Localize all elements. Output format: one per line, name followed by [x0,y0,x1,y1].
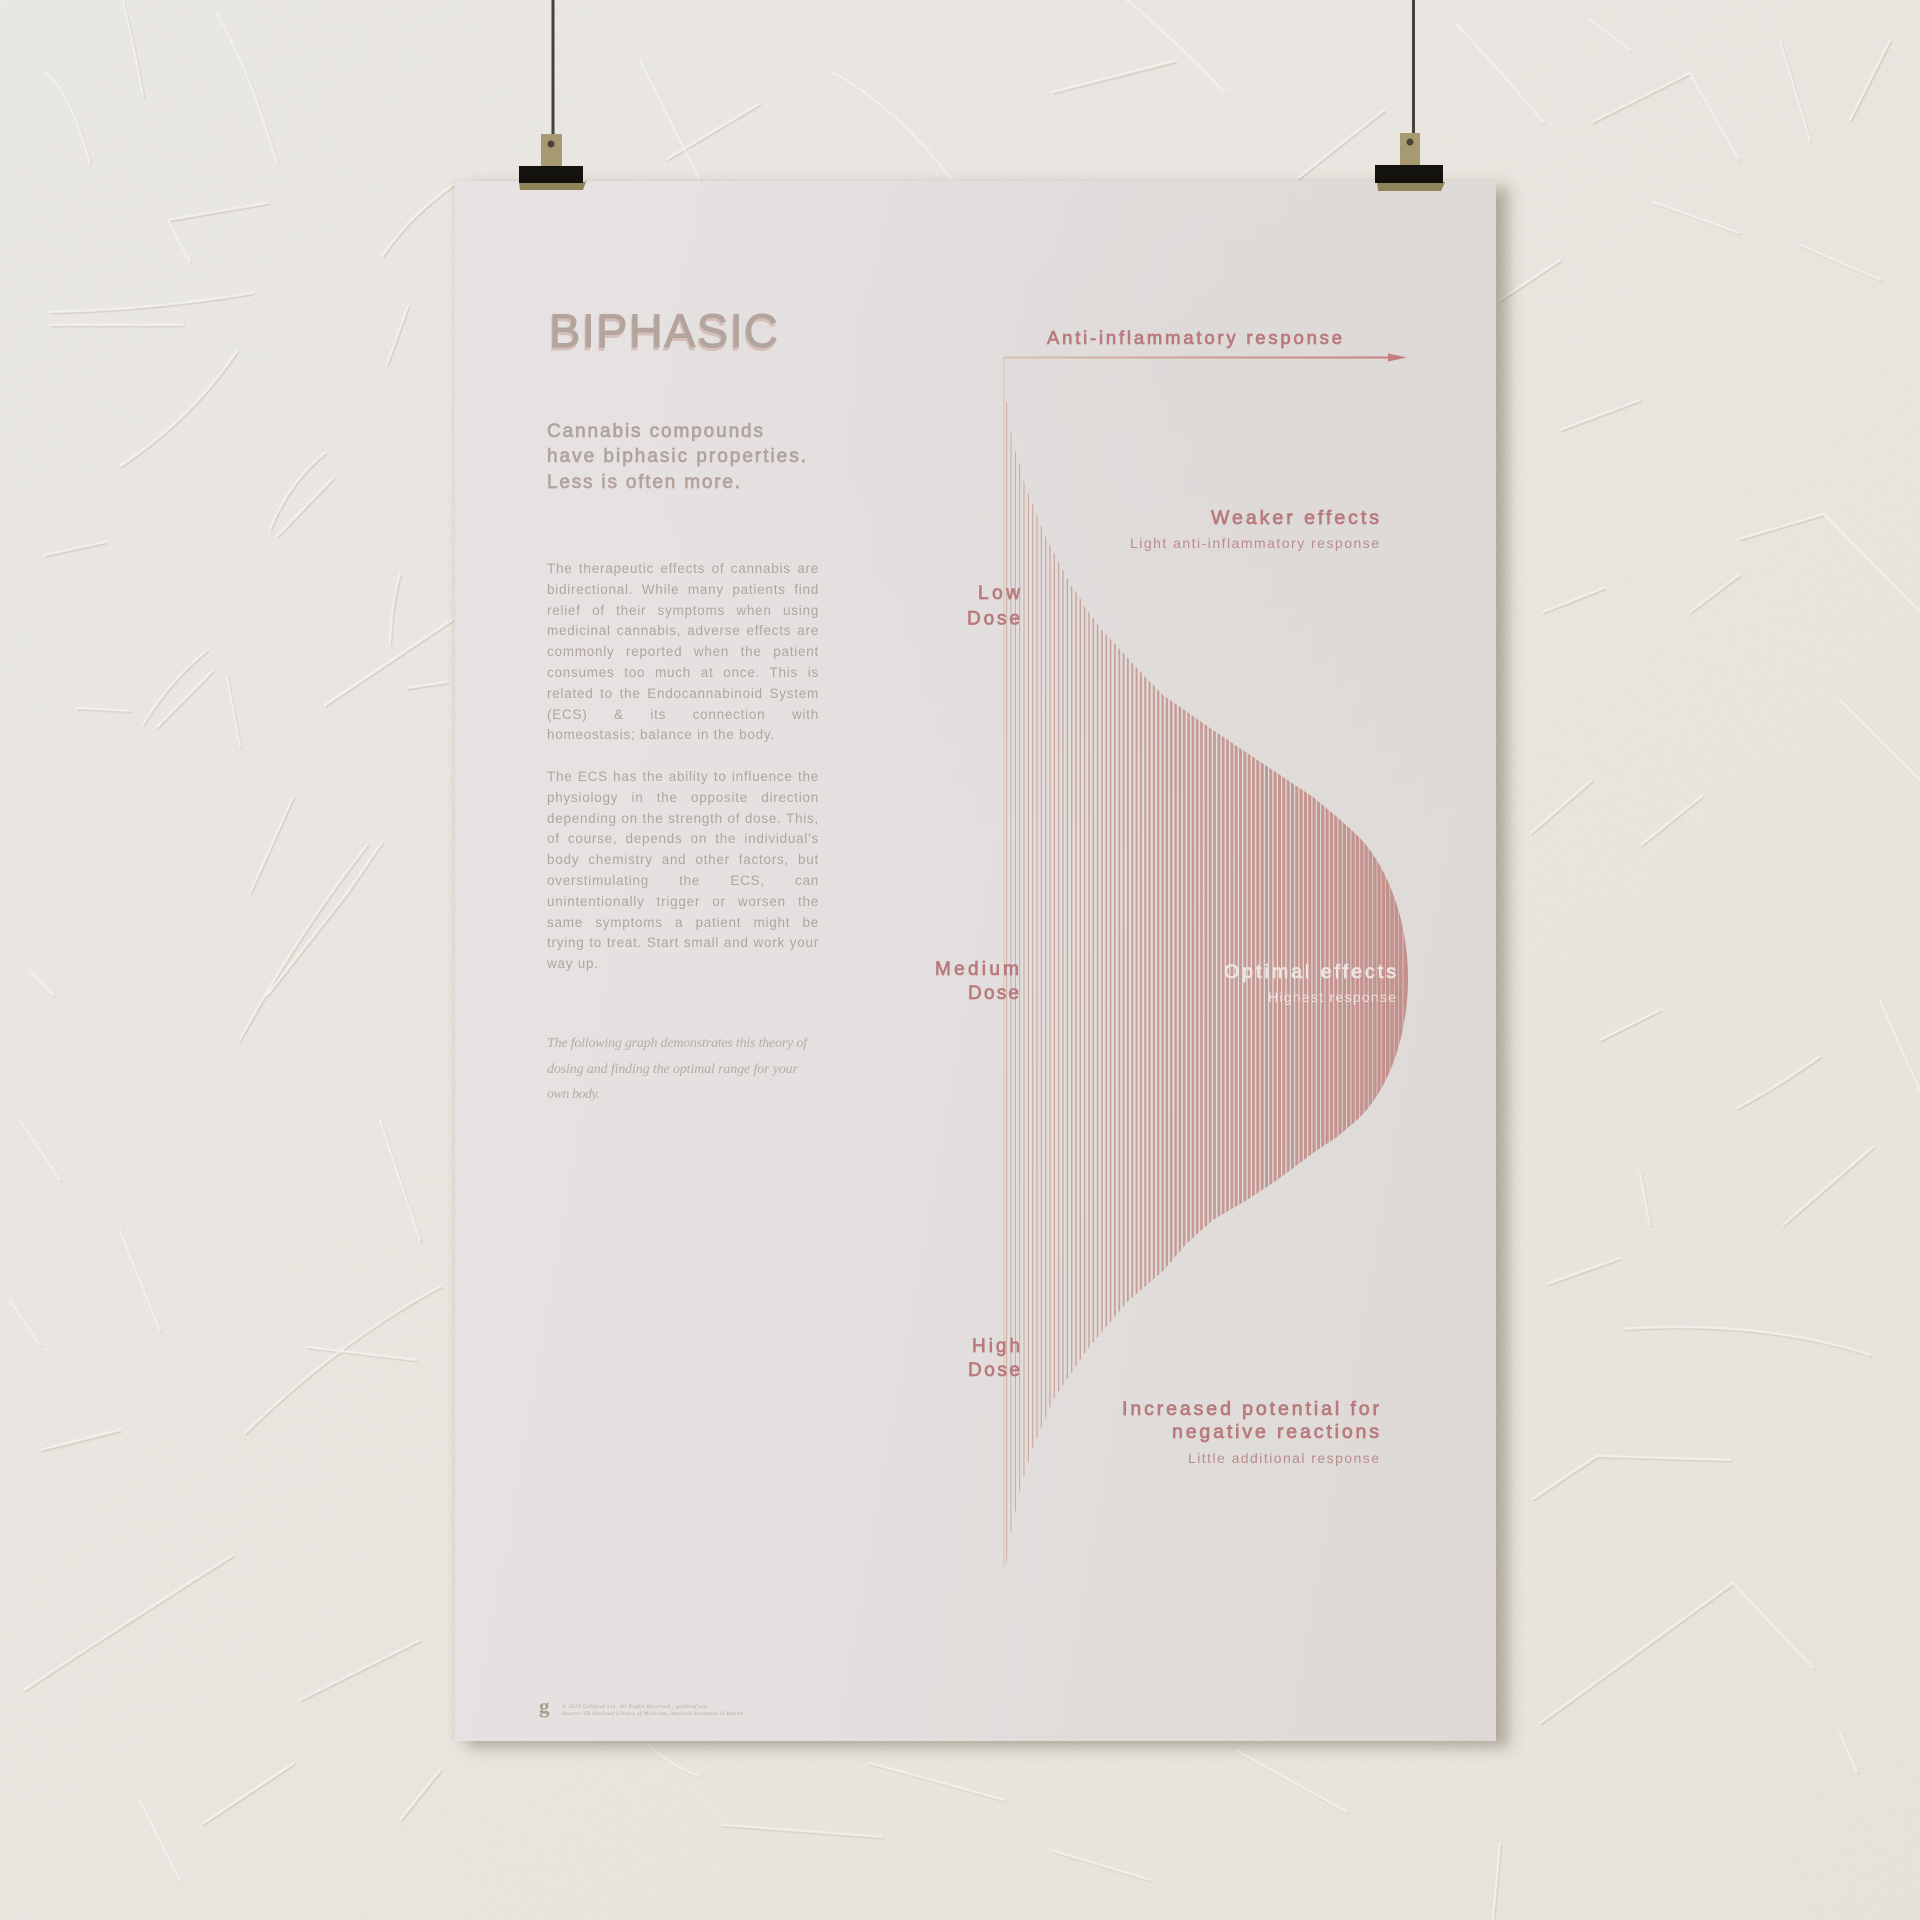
body paragraph one: (ECS) & its connection with [547,707,819,722]
chart and headings artwork [539,304,1408,1718]
dose label: medium: Dose [968,983,1019,1004]
binder clips and wires [519,0,1445,191]
title: BIPHASIC [548,307,777,360]
icon: left binder clip [519,0,587,190]
italic note: The following graph demonstrates this theory of [547,1036,809,1051]
body paragraph two: depending on the strength of dose. This, [547,811,819,826]
footer logo: g [539,1694,550,1718]
italic note [547,1036,809,1102]
x axis label: Anti-inflammatory response [1047,327,1342,348]
icon: right binder clip [1375,0,1445,191]
bell curve of vertical lines [1007,398,1410,1580]
dose label: medium [935,959,1019,1004]
body paragraph one: consumes too much at once. This is [547,665,819,680]
body paragraph one: relief of their symptoms when using [547,603,819,618]
callout: optimal effects [1224,961,1396,1005]
dose label: low: Low [978,583,1020,604]
dose label: high [968,1336,1020,1381]
dose label: low [967,583,1020,630]
callout: weaker effects: Weaker effects [1211,507,1379,529]
x axis arrow [1004,354,1407,362]
callout: weaker effects: Light anti-inflammatory response [1130,535,1379,551]
body paragraph one: The therapeutic effects of cannabis are [547,561,819,576]
italic note: own body. [547,1087,600,1102]
dose label: low: Dose [967,608,1020,630]
body paragraph two: of course, depends on the individual's [547,831,819,846]
body paragraph two: physiology in the opposite direction [547,790,819,805]
footer credits: Source: US National Library of Medicine, National Institutes of Health [562,1710,743,1717]
title: BIPHASIC [549,304,778,357]
body paragraph one: homeostasis; balance in the body. [547,727,775,742]
body paragraph two: way up. [547,956,599,971]
y axis line [1004,357,1005,1567]
body paragraph two: unintentionally trigger or worsen the [547,894,819,909]
callout: increased potential: Little additional response [1188,1450,1379,1466]
callout: optimal effects: Optimal effects [1224,961,1396,983]
body paragraph two: The ECS has the ability to influence the [547,769,819,784]
body paragraph one: commonly reported when the patient [547,644,819,659]
body paragraph two: overstimulating the ECS, can [547,873,819,888]
callout: weaker effects [1130,507,1379,551]
callout: optimal effects: Highest response [1268,989,1396,1005]
body paragraph one: related to the Endocannabinoid System [547,686,819,701]
dose label: medium: Medium [935,959,1019,980]
body paragraph two [547,769,819,971]
body paragraph one: bidirectional. While many patients find [547,582,819,597]
footer credits [562,1703,743,1717]
italic note: dosing and finding the optimal range for your [547,1062,799,1077]
footer credits: © 2019 Goldleaf Ltd. All Rights Reserved | goldleaf.org [562,1703,707,1710]
subheading [547,421,806,493]
subheading: Less is often more. [547,472,740,493]
panel: hanging poster [455,181,1496,1741]
body paragraph one [547,561,819,742]
subheading: have biphasic properties. [547,446,806,467]
dose label: high: High [972,1336,1020,1357]
body paragraph two: body chemistry and other factors, but [547,852,819,867]
body paragraph two: same symptoms a patient might be [547,915,819,930]
callout: increased potential: negative reactions [1172,1421,1379,1443]
body paragraph one: medicinal cannabis, adverse effects are [547,623,819,638]
body paragraph two: trying to treat. Start small and work your [547,935,819,950]
dose label: high: Dose [968,1360,1020,1381]
callout: increased potential: Increased potential for [1122,1398,1380,1420]
subheading: Cannabis compounds [547,421,763,442]
callout: increased potential [1122,1398,1380,1466]
